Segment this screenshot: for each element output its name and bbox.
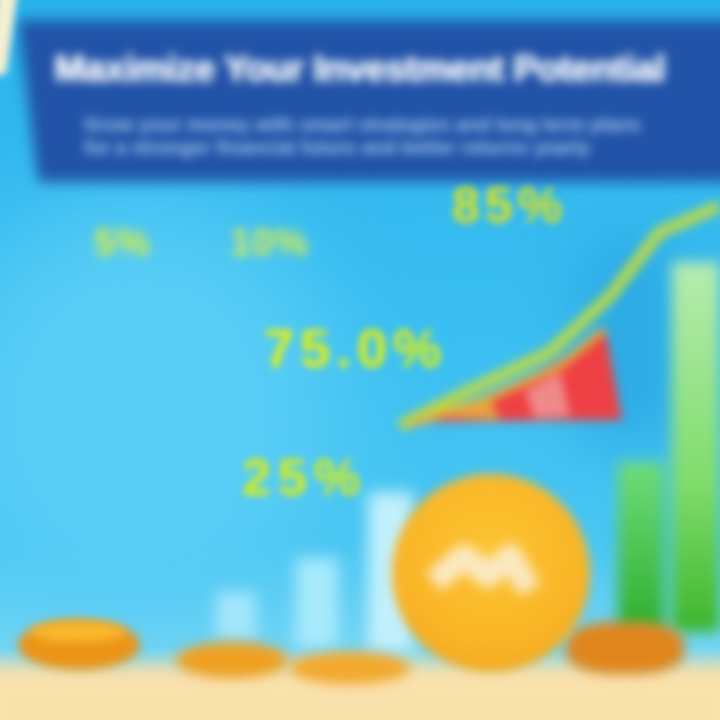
coin: left <box>18 620 140 670</box>
header panel <box>18 20 720 182</box>
right background shade <box>580 240 680 440</box>
subtitle: for a stronger financial future and better returns yearly <box>84 137 590 159</box>
stat: top right: 85% <box>452 177 567 233</box>
stat: top middle small: 10% <box>230 222 309 264</box>
stat: middle large: 75.0% <box>264 319 447 379</box>
stat: top left small: 5% <box>94 222 151 264</box>
large coin <box>392 474 590 672</box>
background glow <box>0 200 340 620</box>
coin: centre left <box>176 642 288 678</box>
coin: centre <box>290 652 410 684</box>
subtitle: Grow your money with smart strategies and long term plans <box>84 114 641 136</box>
subtitle <box>80 112 644 162</box>
coin stack: right <box>566 622 684 674</box>
sand ground <box>0 668 720 720</box>
header accent <box>0 0 18 75</box>
coin highlight left <box>30 622 126 642</box>
title: Maximize Your Investment Potential <box>54 48 665 89</box>
stat: lower: 25% <box>242 449 367 507</box>
